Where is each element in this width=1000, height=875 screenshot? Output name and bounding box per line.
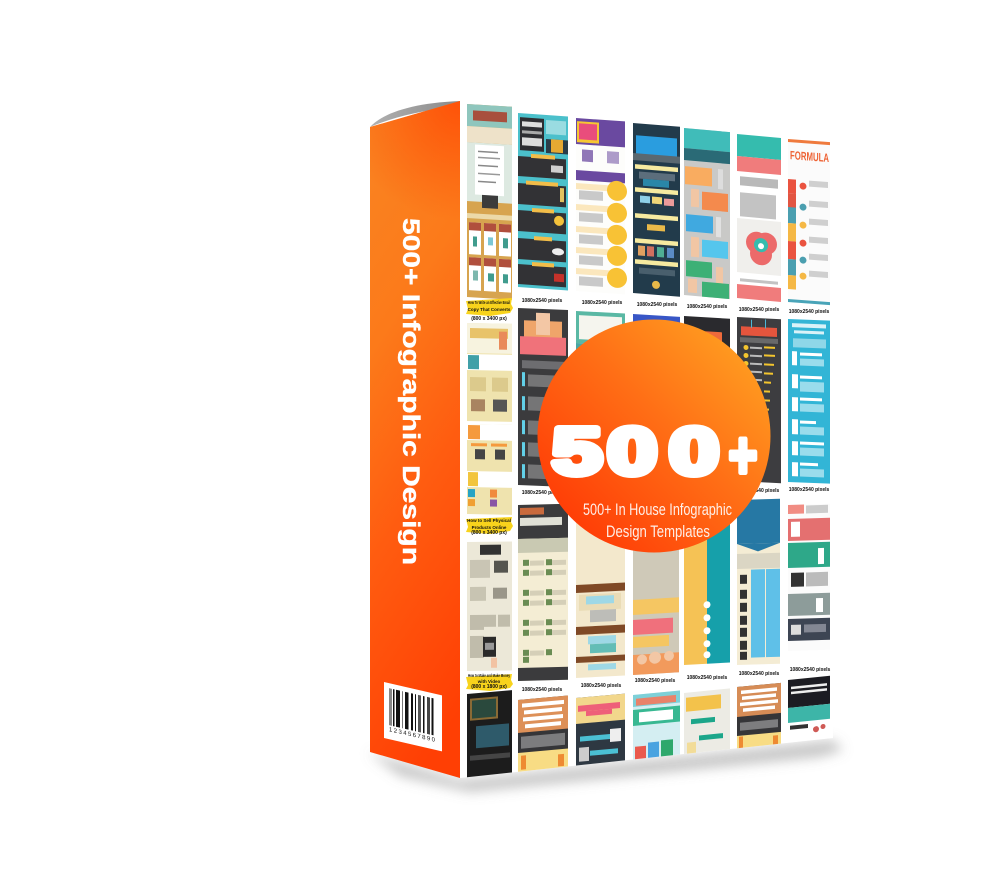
box left side face (370, 101, 460, 778)
brush label: physical products (466, 517, 513, 534)
template: formula: FORMULA (790, 148, 829, 165)
caption row 3 f: 1080x2540 pixels (790, 667, 831, 673)
brush label: videos: How to Make and Make Money (468, 673, 510, 678)
template: brown stripes (576, 522, 625, 678)
template: leaders (737, 499, 780, 665)
caption row 3 c: 1080x2540 pixels (635, 678, 676, 684)
template: speech bubbles (684, 128, 730, 299)
template: dark chart (737, 317, 781, 483)
caption row 3 b: 1080x2540 pixels (581, 683, 622, 689)
caption row 2 left: 1080x2540 pixels (522, 490, 563, 496)
caption 6: 1080x2540 pixels (739, 307, 780, 313)
side face shading (370, 101, 460, 778)
template: surgeries (788, 504, 830, 651)
template: cyan numbered (788, 319, 830, 484)
template: likable orange right (737, 682, 781, 748)
template: venn (737, 134, 781, 302)
template: videos beige (467, 542, 512, 671)
template: blue header (633, 314, 680, 322)
template: tan stripes kids (633, 550, 679, 675)
box front face (460, 101, 833, 778)
plus sign: + (728, 419, 757, 492)
brush label: email copy: Copy That Converts (468, 307, 511, 312)
template: physical products (467, 323, 512, 515)
template: top 7 (576, 694, 625, 766)
template: email copy (467, 104, 512, 300)
panel: template grid (466, 104, 831, 794)
template: differences (576, 311, 625, 350)
badge subtitle (583, 500, 732, 541)
template: yellow teal timeline (684, 524, 730, 665)
template: likable orange left (518, 696, 568, 772)
subtitle line 1: 500+ In House Infographic (583, 500, 732, 519)
template: loyal customers (518, 308, 568, 487)
caption 3: 1080x2540 pixels (582, 300, 623, 306)
brush label: videos (466, 673, 513, 691)
brush label: email copy: How To Write an Effective Email (468, 300, 510, 305)
caption row 2 right b: 1080x2540 pixels (789, 487, 830, 493)
caption 5: 1080x2540 pixels (687, 304, 728, 310)
template: stats purple (576, 118, 627, 295)
digits 500: 500 (552, 415, 719, 488)
template: startups fail (518, 113, 568, 290)
template: chalkboard (467, 690, 512, 778)
caption 4: 1080x2540 pixels (637, 302, 678, 308)
template: dark orange (684, 316, 730, 348)
badge circle (538, 320, 770, 552)
caption row 3 d: 1080x2540 pixels (687, 675, 728, 681)
caption row 2 right a: 1080x2540 pixels (739, 488, 780, 494)
brush label: videos: with Video (477, 679, 500, 684)
brush label: email copy (466, 298, 513, 316)
box drop shadow (368, 740, 843, 792)
barcode bars (389, 688, 434, 735)
caption 7: 1080x2540 pixels (789, 309, 830, 315)
brush label: physical products: How to Sell Physical (467, 518, 511, 523)
caption row 3 e: 1080x2540 pixels (739, 671, 780, 677)
barcode (384, 682, 442, 751)
dimension label 1: (800 x 3400 px) (471, 316, 507, 322)
template: formula (788, 139, 830, 305)
brush label: physical products: Products Online (472, 525, 507, 530)
dimension label 2: (800 x 3400 px) (471, 530, 507, 536)
subtitle line 2: Design Templates (606, 522, 710, 541)
caption row 3 a: 1080x2540 pixels (522, 687, 563, 693)
caption 2: 1080x2540 pixels (522, 298, 563, 304)
template: yellow ribbon (684, 688, 730, 754)
captions and labels (466, 298, 831, 693)
template: power words (518, 504, 568, 681)
template: colors business (633, 690, 680, 760)
dimension label 3: (800 x 1800 px) (471, 684, 507, 690)
template: letter dark (788, 676, 830, 732)
template: business dark (633, 123, 680, 297)
barcode digits: 1234567890 (389, 727, 436, 744)
badge number (552, 415, 757, 492)
box top flap (370, 101, 460, 127)
side title text: 500+ Infographic Design (397, 218, 424, 565)
